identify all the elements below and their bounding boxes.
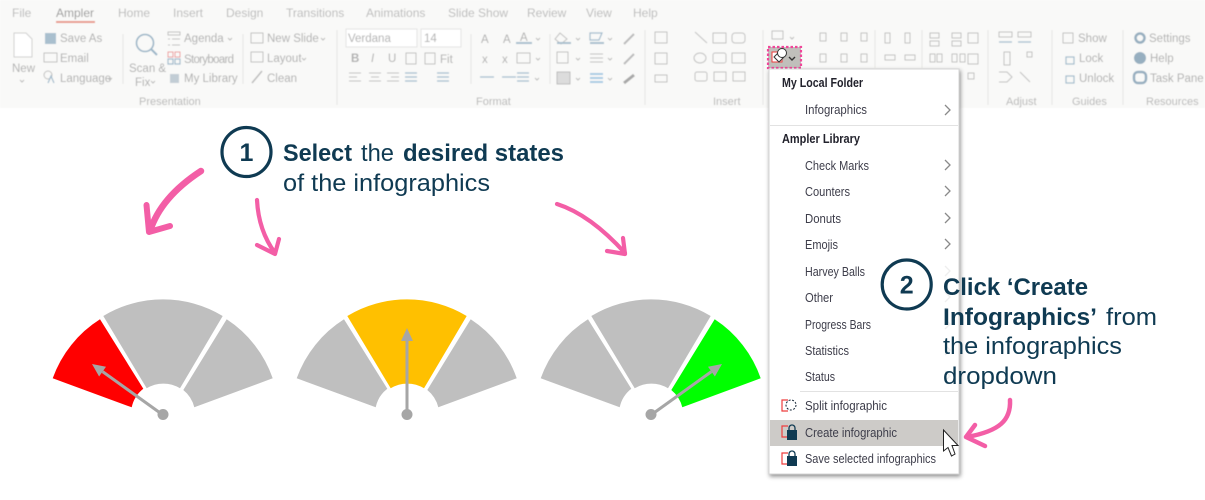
step 2 text: dropdown xyxy=(943,363,1057,390)
ribbon group: format: A xyxy=(520,32,528,44)
menu section: ampler library xyxy=(782,132,958,392)
ribbon group: format: I xyxy=(371,53,375,65)
ribbon group: presentation: Save As xyxy=(60,33,102,45)
menu section: ampler library: Other xyxy=(805,291,833,305)
ribbon group: insert: Insert xyxy=(713,96,741,108)
menu section: ampler library: Donuts xyxy=(805,212,841,226)
step 1 badge: 1 xyxy=(240,139,254,167)
step 1 text: Select xyxy=(283,140,352,167)
menu item: split infographic: Split infographic xyxy=(805,399,887,413)
ribbon group: guides: Guides xyxy=(1072,96,1107,108)
ribbon group: presentation: New Slide xyxy=(267,33,319,45)
ribbon tabs: Home xyxy=(118,6,150,20)
step 2 text: Infographics’ xyxy=(943,304,1097,331)
ribbon group: format: 14 xyxy=(424,33,437,45)
ribbon group: guides: Show xyxy=(1078,33,1107,45)
step 2 text backdrop xyxy=(880,262,958,391)
ribbon group: adjust xyxy=(999,32,1037,108)
menu section: ampler library: Ampler Library xyxy=(782,132,860,146)
ribbon group: format: x xyxy=(502,54,508,66)
ribbon group: format: x xyxy=(482,54,488,66)
step 1 text: desired states xyxy=(403,140,564,167)
ribbon tabs: Help xyxy=(633,6,658,20)
ribbon group: insert xyxy=(655,31,794,108)
menu section: ampler library: Progress Bars xyxy=(805,318,871,332)
infographics dropdown button xyxy=(768,47,801,68)
ribbon group: presentation: Agenda xyxy=(184,33,224,45)
ribbon group: presentation xyxy=(12,32,325,108)
step 2 text: Click ‘Create xyxy=(943,274,1088,301)
gauge: red state xyxy=(53,299,273,420)
ribbon tabs: Animations xyxy=(366,6,425,20)
ribbon group: format: B xyxy=(351,53,359,65)
arrow to green gauge xyxy=(557,204,625,254)
menu item: create infographic: Create infographic xyxy=(805,426,897,440)
ribbon group: format: U xyxy=(388,53,396,65)
ribbon tabs: View xyxy=(586,6,612,20)
step 1 text: the xyxy=(361,140,394,167)
step 2 text: from xyxy=(1106,304,1157,331)
ribbon group: guides: Unlock xyxy=(1079,73,1114,85)
arrow to yellow gauge xyxy=(257,200,279,254)
ribbon group: resources: Task Pane xyxy=(1150,73,1204,85)
ribbon group: presentation: Clean xyxy=(267,73,297,85)
ribbon group: presentation: Storyboard xyxy=(184,54,234,66)
ribbon group: presentation: Fix xyxy=(135,77,151,89)
dropdown menu xyxy=(769,69,959,474)
ribbon group: adjust: Adjust xyxy=(1006,96,1037,108)
step 2 badge: 2 xyxy=(900,272,914,300)
ribbon toolbar xyxy=(0,0,1205,108)
ribbon tabs: Review xyxy=(527,6,567,20)
ribbon tabs: Design xyxy=(226,6,263,20)
menu item: save selected infographics: Save selected infographics xyxy=(805,452,936,466)
ribbon group: guides: Lock xyxy=(1079,53,1104,65)
ribbon tabs xyxy=(12,6,658,23)
ribbon group: format: Verdana xyxy=(348,33,391,45)
ribbon group: resources: Settings xyxy=(1149,33,1191,45)
menu section: my local folder: My Local Folder xyxy=(782,76,863,90)
menu section: ampler library: Status xyxy=(805,370,835,384)
menu section: ampler library: Statistics xyxy=(805,344,849,358)
ribbon group: format: Fit xyxy=(440,54,454,66)
arrow to red gauge xyxy=(146,171,201,232)
step 2 text xyxy=(943,274,1157,390)
gauge: yellow state xyxy=(297,299,517,420)
ribbon group: presentation: My Library xyxy=(184,73,238,85)
step 2 text: the infographics xyxy=(943,333,1122,360)
ribbon tabs: File xyxy=(12,6,32,20)
ribbon group: presentation: Scan & xyxy=(129,63,166,75)
menu section: my local folder: Infographics xyxy=(805,103,867,117)
ribbon group: format xyxy=(346,29,634,108)
ribbon group: format: A xyxy=(481,34,489,46)
arrow to create infographic xyxy=(966,400,1010,446)
ribbon group: presentation: Email xyxy=(60,53,89,65)
step 1 text xyxy=(283,140,564,197)
menu item: create infographic xyxy=(770,420,958,446)
ribbon tabs: Ampler xyxy=(56,6,94,20)
mouse cursor xyxy=(944,430,958,456)
ribbon separators xyxy=(123,30,1123,105)
menu section: my local folder xyxy=(770,76,958,126)
ribbon group: presentation: Presentation xyxy=(139,96,201,108)
ribbon tabs: Slide Show xyxy=(448,6,508,20)
menu section: ampler library: Counters xyxy=(805,185,850,199)
menu section: ampler library: Harvey Balls xyxy=(805,265,865,279)
ribbon group: presentation: Layout xyxy=(267,53,302,65)
step 1 text: of the infographics xyxy=(283,170,490,197)
ribbon group: presentation: Language xyxy=(60,73,111,85)
ribbon group: presentation: New xyxy=(12,63,36,75)
ribbon group: guides xyxy=(1063,33,1114,108)
gauge: green state xyxy=(541,299,761,420)
ribbon group: arrange xyxy=(820,33,978,79)
ribbon tabs: Transitions xyxy=(286,6,344,20)
ribbon group: format: A xyxy=(503,34,511,46)
step 2 badge xyxy=(882,260,931,309)
ribbon group: resources xyxy=(1134,33,1204,108)
menu section: ampler library: Check Marks xyxy=(805,159,869,173)
menu section: ampler library: Emojis xyxy=(805,238,838,252)
step 1 badge xyxy=(222,128,271,176)
ribbon group: resources: Resources xyxy=(1146,96,1199,108)
ribbon group: format: Format xyxy=(476,96,511,108)
ribbon group: resources: Help xyxy=(1150,53,1174,65)
ribbon tabs: Insert xyxy=(173,6,204,20)
